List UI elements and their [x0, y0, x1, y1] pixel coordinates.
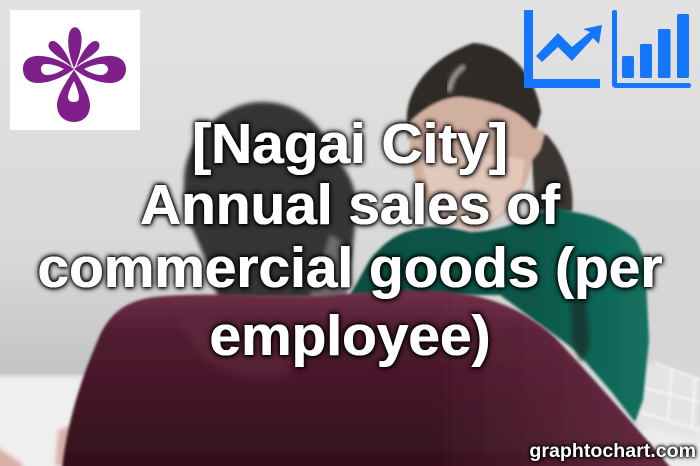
- icon: bar chart: [612, 10, 691, 88]
- icon: line chart with rising arrow: [524, 10, 602, 88]
- title: Annual sales of: [140, 174, 560, 237]
- title: commercial goods (per: [38, 237, 662, 300]
- watermark: site name: graphtochart.com: [529, 440, 696, 462]
- title: employee): [210, 305, 490, 368]
- title: [Nagai City]: [192, 113, 508, 176]
- logo: purple city emblem on white: [10, 10, 140, 130]
